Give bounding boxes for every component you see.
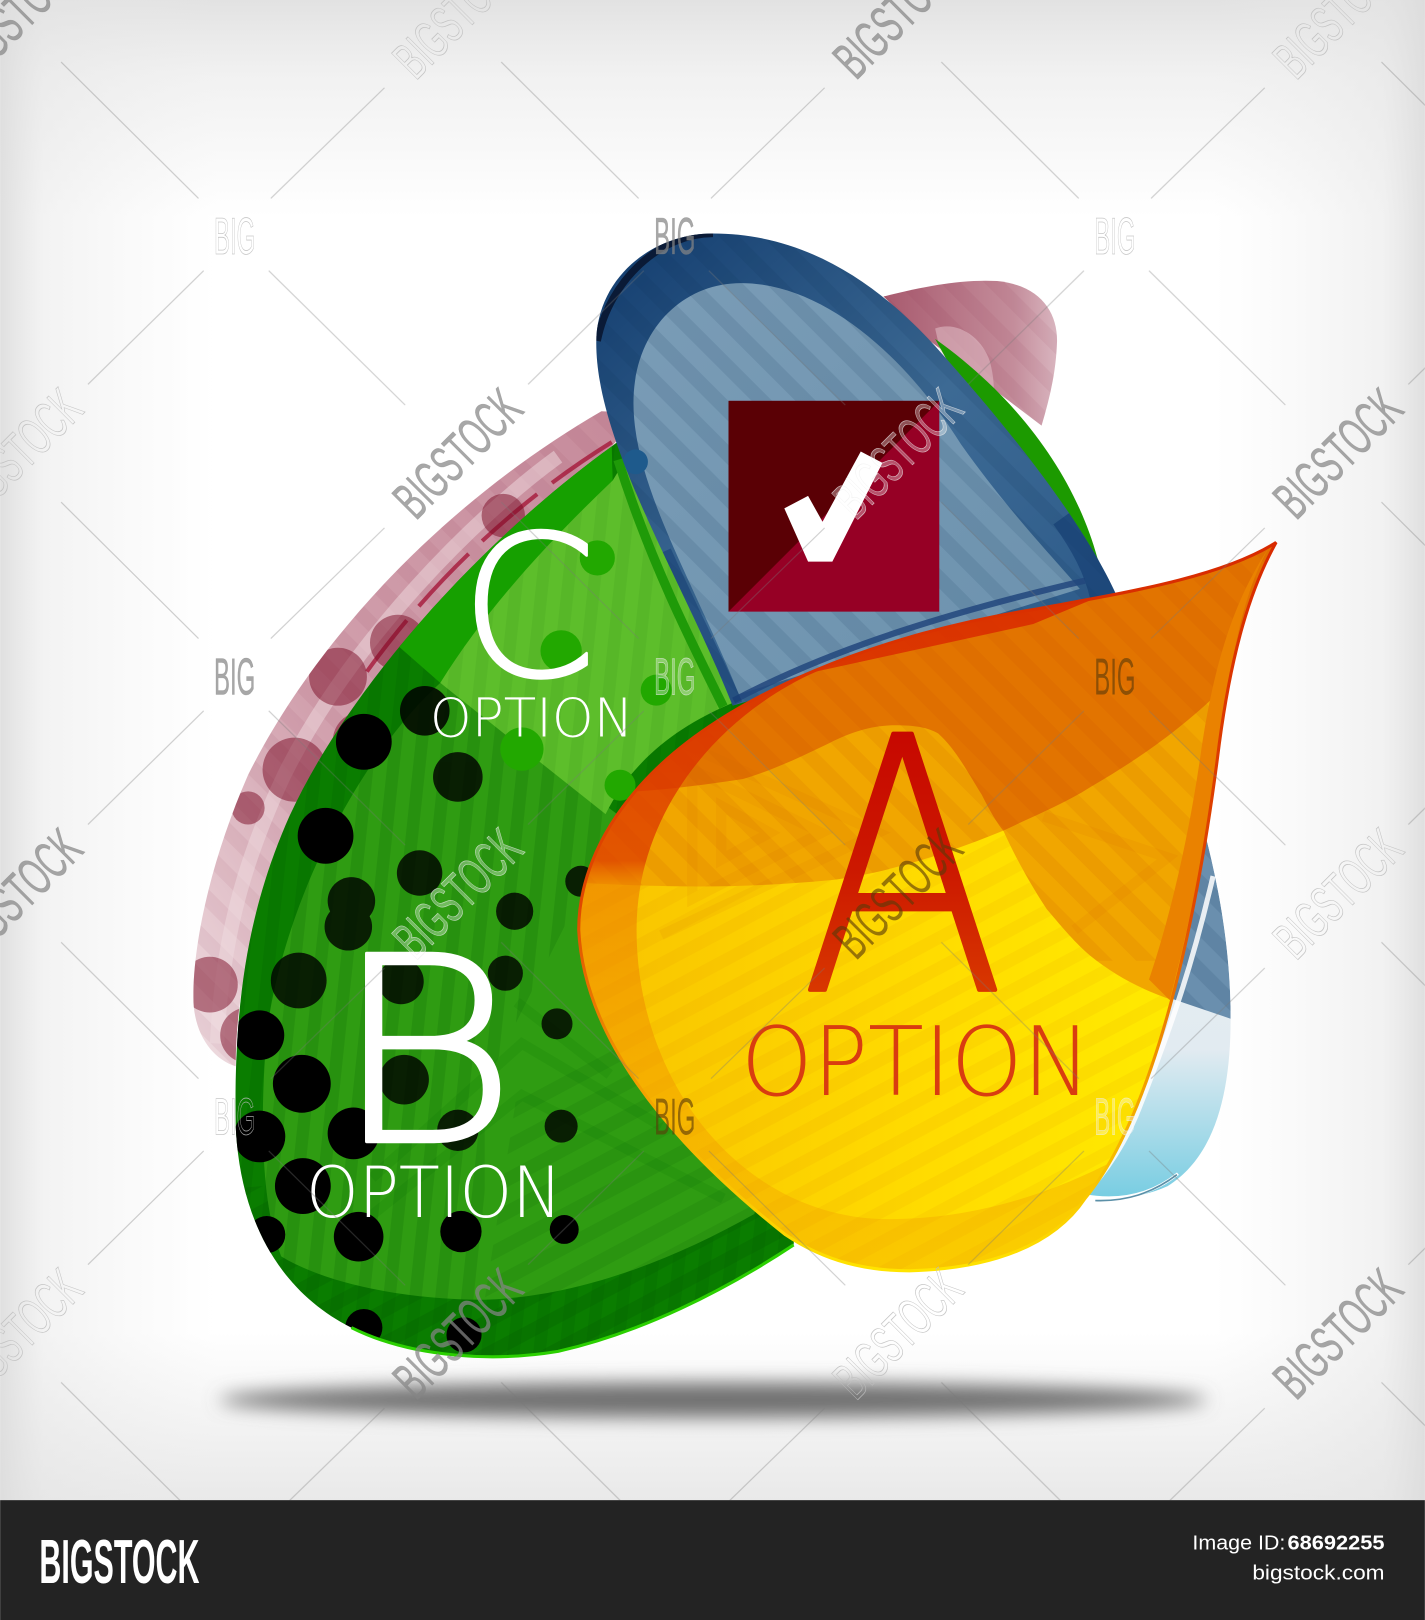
chevrons <box>660 884 781 940</box>
panel: option A orange leaf <box>558 517 1302 1281</box>
image id: Image ID: <box>1192 1532 1285 1555</box>
text: BIG <box>1094 647 1136 705</box>
upper rim <box>398 446 613 683</box>
chevrons <box>341 1002 723 1240</box>
ground shadow <box>219 1382 1207 1418</box>
text: BIG <box>1094 207 1136 265</box>
footer bar <box>0 1500 1425 1620</box>
letter C: C <box>460 495 597 723</box>
option B label: OPTION <box>306 1152 562 1234</box>
right edge band <box>1149 548 1269 1000</box>
option C label: OPTION <box>430 687 633 750</box>
leaf bright edge <box>351 1245 794 1357</box>
watermark: BIG marks: BIG <box>654 1087 695 1145</box>
letter B: B <box>332 902 518 1203</box>
watermark: BIG marks: BIG <box>214 1087 255 1145</box>
light top wedge <box>440 464 732 814</box>
watermark: BIGSTOCK marks: BIGSTOCK <box>822 1258 974 1410</box>
watermark: BIGSTOCK marks: BIGSTOCK <box>822 818 974 970</box>
bottom band stripes <box>244 1186 780 1355</box>
image id <box>1192 1532 1385 1585</box>
inner green body <box>263 683 755 1300</box>
panel: option C pink band <box>182 411 641 1066</box>
yellow lower region <box>568 831 1173 1281</box>
panel: option B green leaf <box>236 442 794 1358</box>
pink band dots <box>182 494 525 1063</box>
black dots <box>234 686 596 1352</box>
watermark: BIG marks: BIG <box>654 207 695 265</box>
panel: back pink petal <box>883 281 1057 426</box>
watermark: BIG marks: BIG <box>214 207 255 265</box>
watermark: BIGSTOCK marks: BIGSTOCK <box>822 378 974 530</box>
option A label: OPTION <box>741 1008 1091 1118</box>
letter A: A <box>801 664 1005 1073</box>
text: BIG <box>1094 1087 1136 1145</box>
top dark orange region <box>638 547 1272 830</box>
left rim <box>580 601 1106 1269</box>
watermark: BIGSTOCK marks: BIGSTOCK <box>382 818 534 970</box>
watermark: BIG marks: BIG <box>654 647 695 705</box>
dots on light green <box>500 540 672 801</box>
footer bar: BIGSTOCK <box>39 1528 200 1597</box>
panel: teardrop back right <box>1090 840 1231 1202</box>
panel: green sliver behind blue <box>935 339 1116 599</box>
watermark: BIGSTOCK marks: BIGSTOCK <box>382 378 534 530</box>
image id: bigstock.com <box>1252 1562 1385 1585</box>
panel: blue leaf with check <box>589 227 1126 713</box>
image id: 68692255 <box>1287 1532 1385 1555</box>
leaf edge <box>579 542 1276 1271</box>
watermark: BIG marks <box>214 207 1136 1145</box>
watermark: BIGSTOCK marks: BIGSTOCK <box>382 1258 534 1410</box>
icon: check square <box>729 401 939 612</box>
watermark: BIG marks: BIG <box>214 647 255 705</box>
